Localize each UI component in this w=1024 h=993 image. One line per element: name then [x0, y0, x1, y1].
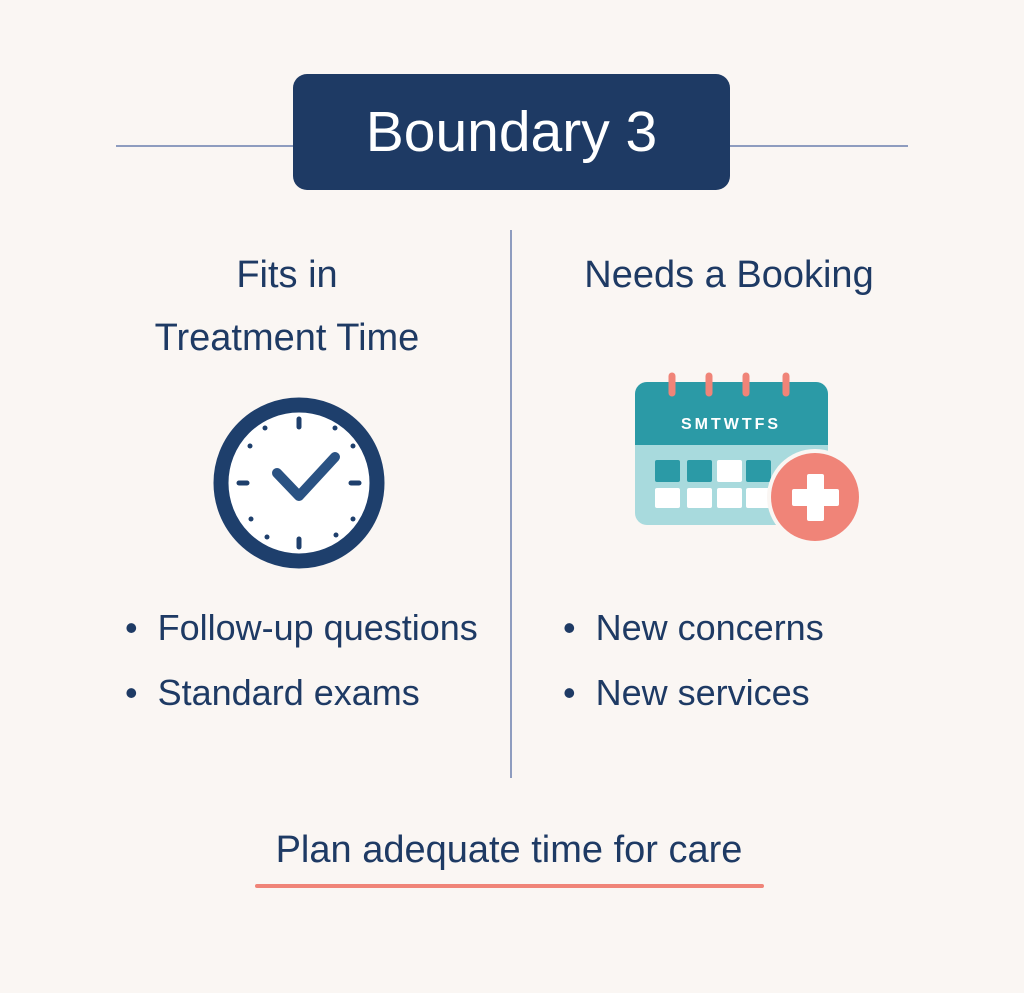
bullets: left: [125, 607, 478, 713]
heading: fits in treatment time: [155, 254, 419, 359]
bullets: left: • Follow-up questions: [125, 607, 478, 648]
heading: fits in treatment time: Treatment Time: [155, 317, 419, 359]
heading: needs a booking: Needs a Booking: [584, 254, 874, 296]
heading: fits in treatment time: Fits in: [236, 254, 338, 296]
icon: clock with check: [214, 398, 384, 568]
footer message: Plan adequate time for care: [276, 829, 742, 871]
icon: calendar with plus: SMTWTFS: [681, 416, 781, 433]
title: [293, 74, 730, 190]
bullets: right: • New services: [563, 672, 810, 713]
bullets: right: [563, 607, 824, 713]
icon: calendar with plus: [635, 372, 859, 541]
title: Boundary 3: [366, 100, 657, 164]
bullets: right: • New concerns: [563, 607, 824, 648]
footer underline: [255, 884, 764, 888]
bullets: left: • Standard exams: [125, 672, 420, 713]
